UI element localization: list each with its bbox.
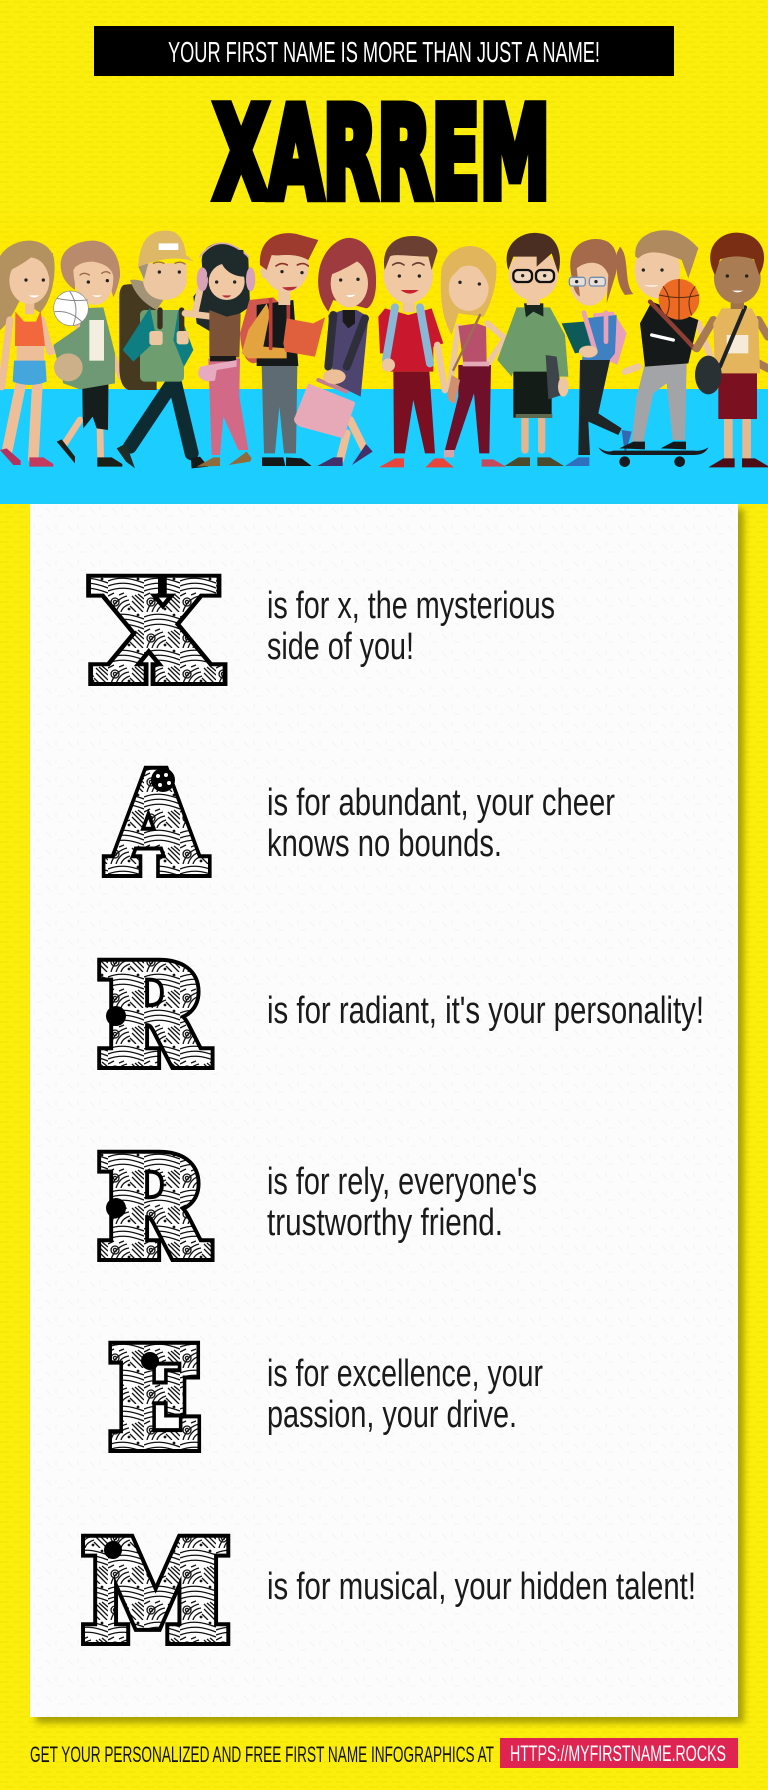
blue floor band bbox=[0, 389, 768, 504]
student 12: boy in tank top with shoulder bag bbox=[695, 233, 768, 467]
student 8: blonde girl with shoulder bag bbox=[426, 246, 506, 467]
row X: text line two: side of you! bbox=[267, 626, 414, 668]
row E: text: is for excellence, your bbox=[267, 1353, 543, 1395]
row R: letter: R bbox=[99, 939, 207, 1094]
row R second: letter: R bbox=[99, 1131, 207, 1286]
student 3: boy in cap with backpack bbox=[117, 231, 208, 468]
row A: text line two: knows no bounds. bbox=[267, 823, 502, 865]
student 11: skater boy with basketball bbox=[598, 230, 710, 467]
row R second: text: is for rely, everyone's bbox=[267, 1161, 537, 1203]
top banner bbox=[94, 26, 674, 76]
row M: letter: M bbox=[84, 1515, 228, 1670]
row M: letter: M bbox=[84, 1515, 228, 1670]
student 4: girl with headphones and pink trousers bbox=[185, 243, 255, 467]
row A: letter: A bbox=[108, 747, 204, 902]
row E: text line two: passion, your drive. bbox=[267, 1394, 517, 1436]
row A: text: is for abundant, your cheer bbox=[267, 782, 615, 824]
student 5: boy with book bbox=[240, 233, 325, 466]
row X: letter: X bbox=[95, 555, 219, 710]
footer call to action: GET YOUR PERSONALIZED AND FREE FIRST NAME INFOGRAPHICS AT bbox=[30, 1742, 494, 1767]
panel: letter meanings bbox=[30, 504, 744, 1723]
row R second: letter: R bbox=[99, 1131, 207, 1286]
student 2: girl with volleyball and green jacket bbox=[53, 241, 122, 467]
row X: text: is for x, the mysterious bbox=[267, 585, 555, 627]
student 9: boy with glasses and laptop bbox=[497, 233, 569, 466]
row X: letter: X bbox=[95, 555, 219, 710]
illustration: group of twelve students bbox=[0, 230, 768, 468]
row A: letter: A bbox=[108, 747, 204, 902]
student 1: girl in orange top bbox=[0, 241, 77, 467]
row R second: text line two: trustworthy friend. bbox=[267, 1202, 503, 1244]
student 7: boy in red shirt with backpack straps bbox=[378, 236, 453, 467]
student 6: girl with red hair and pink bag bbox=[294, 238, 376, 466]
row R: letter: R bbox=[99, 939, 207, 1094]
student 10: girl with ponytail, pink backpack and tablet bbox=[562, 239, 633, 466]
row E: letter: E bbox=[110, 1322, 200, 1477]
row E: letter: E bbox=[110, 1322, 200, 1477]
